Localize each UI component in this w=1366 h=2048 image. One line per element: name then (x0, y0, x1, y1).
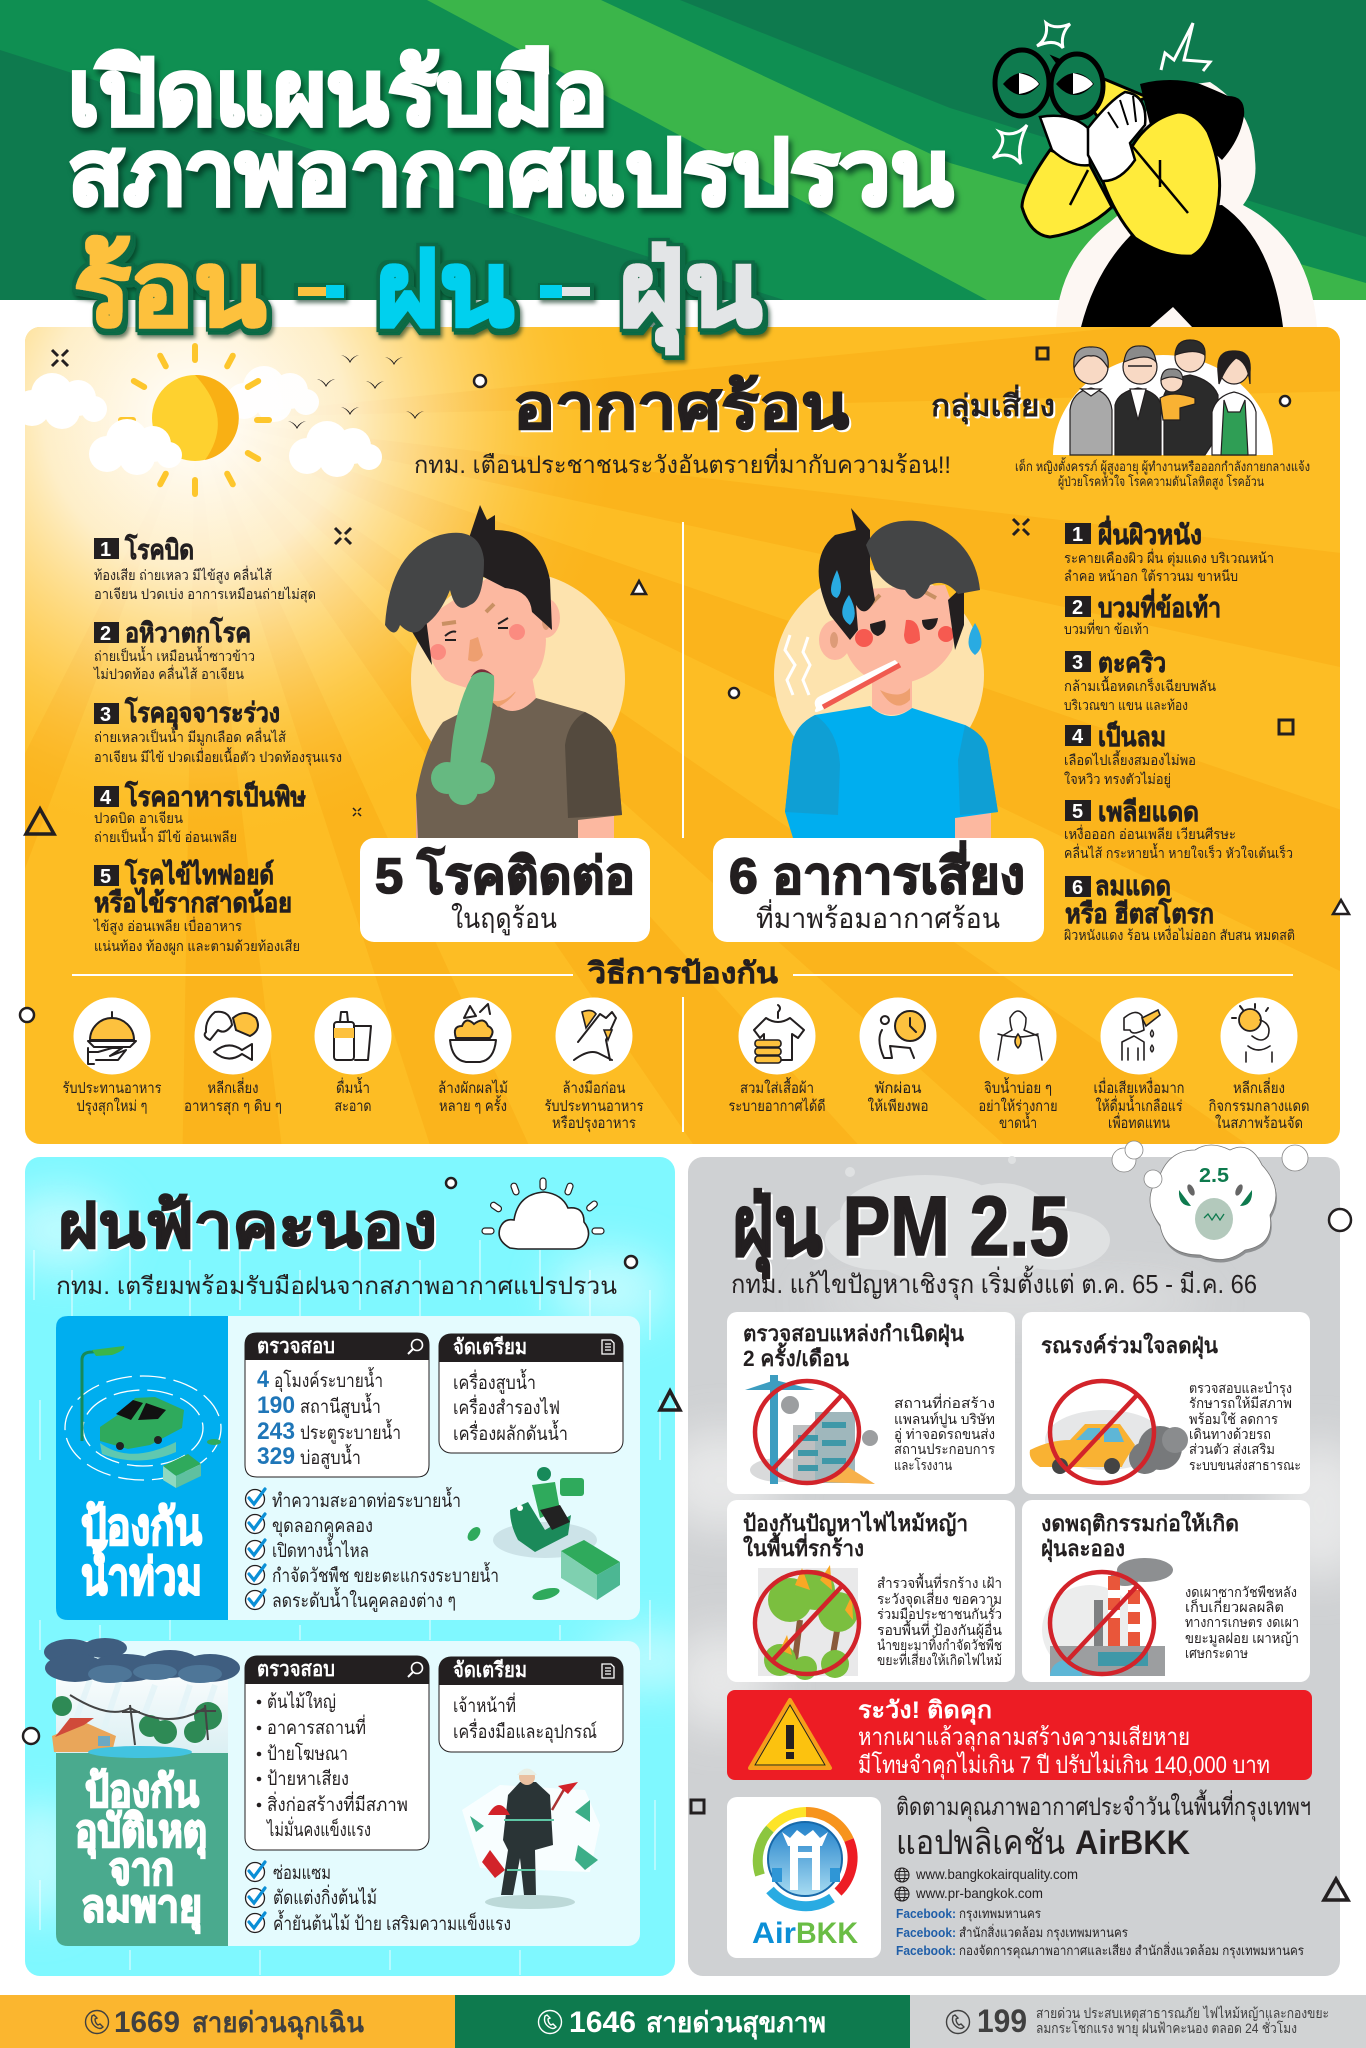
tip: avoid outdoor activity: กิจกรรมกลางแดด (1208, 1098, 1310, 1115)
symptom 5 (1064, 797, 1293, 861)
logo: AirBKK: Air (752, 1917, 796, 1950)
item 4 (94, 779, 306, 845)
label: flood prevention: ป้องกัน (81, 1499, 202, 1555)
symptom 3: ตะคริว (1098, 648, 1166, 678)
card: inspect dust sources: สถานที่ก่อสร้าง (894, 1394, 995, 1411)
symptom 4 (1064, 719, 1196, 788)
warning banner: หากเผาแล้วลุกลามสร้างความเสียหาย (858, 1724, 1190, 1752)
card: inspect dust sources (727, 1312, 1015, 1494)
box: inspect: 243 (257, 1418, 295, 1445)
item 3: โรคอุจจาระร่วง (124, 696, 280, 730)
card: inspect dust sources: และโรงงาน (894, 1457, 952, 1473)
heat heading subtitle: hot rain dust words (74, 232, 762, 354)
tip: sip water: ขาดน้ำ (999, 1112, 1037, 1132)
card: reduce dust campaign: รณรงค์ร่วมใจลดฝุ่น (1041, 1332, 1218, 1360)
text block: AirBKK app info: www.pr-bangkok.com (915, 1885, 1043, 1901)
tip: mineral drink: เมื่อเสียเหงื่อมาก (1094, 1077, 1184, 1097)
box: prepare: เครื่องสูบน้ำ (453, 1369, 536, 1394)
item 1 (94, 533, 316, 603)
risk group: ผู้ป่วยโรคหัวใจ โรคความดันโลหิตสูง โรคอ้วน (1058, 474, 1264, 490)
logo: AirBKK (727, 1797, 881, 1958)
tip: avoid raw food: อาหารสุก ๆ ดิบ ๆ (184, 1098, 282, 1116)
tip: rest: ให้เพียงพอ (868, 1097, 928, 1115)
symptom 4: เลือดไปเลี้ยงสมองไม่พอ (1064, 750, 1196, 768)
item 2: ไม่ปวดท้อง คลื่นไส้ อาเจียน (93, 665, 244, 682)
sun with clouds and birds (14, 343, 424, 497)
item 4: 4 (100, 787, 112, 809)
heading: PM 2.5 (731, 1179, 1257, 1300)
card: stop dust behaviours: เก็บเกี่ยวผลผลิต (1185, 1598, 1284, 1615)
box: inspect: บ่อสูบน้ำ (300, 1444, 361, 1469)
smoke behind heading (825, 1156, 1110, 1285)
box: prepare storm: เครื่องมือและอุปกรณ์ (453, 1718, 597, 1744)
card: reduce dust campaign: รักษารถให้มีสภาพ (1189, 1395, 1292, 1411)
risk group (931, 340, 1310, 490)
symptom 5: เหงื่อออก อ่อนเพลีย เวียนศีรษะ (1064, 825, 1236, 842)
hotline 1646 (538, 2006, 826, 2040)
checklist: flood: เปิดทางน้ำไหล (272, 1537, 369, 1562)
card: stop dust behaviours: เศษกระดาษ (1185, 1645, 1248, 1661)
label: storm prevention (75, 1767, 207, 1934)
box: prepare storm: เจ้าหน้าที่ (453, 1692, 516, 1717)
hotline 199: ลมกระโชกแรง พายุ ฝนฟ้าคะนอง ตลอด 24 ชั่วโมง (1036, 2019, 1297, 2037)
hotline 1669 (86, 2006, 364, 2040)
card: prevent grass fires: รอบพื้นที่ ป้องกันผู้อื่น (877, 1620, 1002, 1639)
item 3: อาเจียน มีไข้ ปวดเมื่อยเนื้อตัว ปวดท้องรุนแรง (94, 747, 342, 766)
icon: no factory (1042, 1558, 1173, 1676)
box: inspect storm: ป้ายโฆษณา (267, 1742, 348, 1765)
label: storm prevention: อุบัติเหตุ (75, 1807, 207, 1859)
item 3: 3 (100, 704, 111, 726)
heading: hot weather (414, 373, 951, 479)
icon: warning triangle (750, 1700, 830, 1768)
heading: hot weather: อากาศร้อน (513, 373, 849, 442)
box: inspect: 329 (257, 1443, 295, 1470)
title: เปิดแผนรับมือ (68, 44, 608, 144)
heading: thunderstorm (56, 1192, 617, 1300)
label: flood prevention (81, 1499, 202, 1605)
card: prevent grass fires: ป้องกันปัญหาไฟไหม้หญ้า (743, 1510, 968, 1537)
checklist: flood: ลดระดับน้ำในคูคลองต่าง ๆ (272, 1587, 456, 1612)
card: storm accidents (44, 1638, 640, 1946)
symptom 6: ผิวหนังแดง ร้อน เหงื่อไม่ออก สับสน หมดสติ (1064, 926, 1295, 943)
text block: AirBKK app info: www.bangkokairquality.com (915, 1866, 1078, 1882)
card: reduce dust campaign: ตรวจสอบและบำรุง (1189, 1380, 1292, 1397)
title: สภาพอากาศแปรปรวน (68, 124, 953, 224)
box: inspect: 4 (257, 1366, 270, 1393)
icon: no fire (755, 1565, 859, 1680)
prevention icons row (62, 998, 1310, 1133)
card: prevent grass fires: สำรวจพื้นที่รกร้าง เฝ้า (877, 1573, 1002, 1591)
item 1: ท้องเสีย ถ่ายเหลว มีไข้สูง คลื่นไส้ (94, 566, 272, 584)
title (68, 44, 953, 224)
tip: avoid raw food (184, 998, 282, 1116)
callout: 5 infectious diseases: ในฤดูร้อน (451, 902, 557, 936)
box: inspect storm (245, 1656, 429, 1850)
tip: wash hands: รับประทานอาหาร (544, 1098, 644, 1115)
tip: avoid outdoor activity: ในสภาพร้อนจัด (1215, 1114, 1303, 1132)
symptom 1 (1064, 515, 1274, 584)
checklist: storm (246, 1862, 511, 1935)
tip: fresh food: ปรุงสุกใหม่ ๆ (76, 1097, 148, 1116)
list: 5 infectious diseases (93, 533, 342, 955)
box: inspect: ประตูระบายน้ำ (300, 1419, 401, 1444)
yellow panel: hot weather (25, 327, 1340, 1144)
card: prevent grass fires: ในพื้นที่รกร้าง (743, 1532, 864, 1561)
box: inspect: 190 (257, 1392, 295, 1419)
heading: thunderstorm: ฝนฟ้าคะนอง (58, 1192, 437, 1261)
card: stop dust behaviours: ฝุ่นละออง (1041, 1536, 1125, 1563)
card: reduce dust campaign: ส่วนตัว ส่งเสริม (1189, 1441, 1275, 1457)
illustration: sick man vomiting (385, 505, 625, 840)
box: inspect: ตรวจสอบ (257, 1335, 335, 1358)
panel: PM 2.5 dust (660, 1141, 1366, 1976)
card: prevent grass fires (727, 1500, 1015, 1682)
illustration: man with heat symptoms (774, 508, 998, 840)
mascot: PM 2.5 dust cloud (1112, 1141, 1308, 1262)
checklist: flood: ทำความสะอาดท่อระบายน้ำ (272, 1487, 461, 1512)
card: reduce dust campaign: พร้อมใช้ ลดการ (1189, 1411, 1278, 1427)
illustration: flooded car (65, 1346, 221, 1488)
heading: prevention: วิธีการป้องกัน (587, 958, 778, 990)
box: inspect storm: ป้ายหาเสียง (267, 1768, 349, 1790)
callout: 6 risk symptoms: ที่มาพร้อมอากาศร้อน (756, 899, 1000, 934)
item 4: ถ่ายเป็นน้ำ มีไข้ อ่อนเพลีย (94, 827, 237, 845)
symptom 2: บวมที่ข้อเท้า (1098, 588, 1221, 623)
box: inspect storm: อาคารสถานที่ (267, 1714, 366, 1739)
text block: AirBKK app info: Facebook: (896, 1906, 956, 1921)
symptom 1: ลำคอ หน้าอก ใต้ราวนม ขาหนีบ (1064, 568, 1238, 584)
card: stop dust behaviours: ทางการเกษตร งดเผา (1185, 1614, 1299, 1630)
symptom 2: บวมที่ขา ข้อเท้า (1064, 620, 1149, 637)
symptom 6 (1064, 871, 1295, 943)
text block: AirBKK app info: สำนักสิ่งแวดล้อม กรุงเทพมหานคร (959, 1924, 1128, 1941)
checklist: storm: ซ่อมแซม (273, 1863, 331, 1884)
box: prepare: จัดเตรียม (453, 1335, 527, 1359)
hotline 199: 199 (977, 2003, 1027, 2039)
hotline 1669: 1669 (114, 2006, 180, 2039)
callout: 6 risk symptoms (713, 838, 1044, 942)
hotline 199 (946, 2003, 1329, 2039)
woman with binoculars illustration (993, 23, 1317, 327)
text block: AirBKK app info: กรุงเทพมหานคร (959, 1906, 1041, 1922)
item 1: 1 (100, 539, 111, 561)
item 5: แน่นท้อง ท้องผูก และตามด้วยท้องเสีย (94, 938, 300, 955)
item 1: อาเจียน ปวดเบ่ง อาการเหมือนถ่ายไม่สุด (94, 586, 316, 603)
hotline 1669: สายด่วนฉุกเฉิน (192, 2007, 364, 2040)
item 3 (94, 696, 342, 766)
hotline 1646: 1646 (569, 2006, 636, 2039)
icon: cloud (482, 1178, 604, 1249)
box: inspect storm: ตรวจสอบ (257, 1658, 335, 1681)
box: prepare storm (439, 1657, 623, 1752)
symptom 2 (1064, 588, 1221, 637)
tip: rest (860, 998, 936, 1115)
symptom 2: 2 (1072, 597, 1083, 619)
heading: PM 2.5: กทม. แก้ไขปัญหาเชิงรุก เริ่มตั้งแต่ ต.ค. 65 - มี.ค. 66 (731, 1265, 1257, 1300)
box: inspect: สถานีสูบน้ำ (300, 1393, 381, 1418)
tip: wash vegetables (434, 998, 512, 1115)
decorative marks (20, 348, 1351, 1900)
tip: rest: พักผ่อน (874, 1080, 922, 1097)
text block: AirBKK app info: กองจัดการคุณภาพอากาศและเสียง สำนักสิ่งแวดล้อม กรุงเทพมหานคร (959, 1942, 1304, 1959)
item 5: 5 (100, 866, 111, 888)
card: stop dust behaviours: งดเผาซากวัชพืชหลัง (1185, 1584, 1297, 1600)
item 2: ถ่ายเป็นน้ำ เหมือนน้ำซาวข้าว (94, 646, 255, 664)
card: prevent grass fires: ร่วมมือประชาชนกันรั้ว (877, 1604, 1002, 1622)
checklist: flood (246, 1487, 499, 1612)
item 4: โรคอาหารเป็นพิษ (124, 779, 306, 812)
item 5 (93, 858, 300, 955)
symptom 3: 3 (1072, 652, 1083, 674)
symptom 6: 6 (1072, 877, 1083, 899)
tip: mineral drink: เพื่อทดแทน (1108, 1112, 1170, 1132)
list: 6 heat symptoms (1064, 515, 1295, 943)
heading: thunderstorm: กทม. เตรียมพร้อมรับมือฝนจากสภาพอากาศแปรปรวน (56, 1273, 617, 1300)
text block: AirBKK app info: Facebook: (896, 1943, 956, 1958)
symptom 6: หรือ ฮีตสโตรก (1065, 897, 1214, 929)
item 1: โรคบิด (124, 533, 194, 565)
tip: mineral drink: ให้ดื่มน้ำเกลือแร่ (1096, 1095, 1182, 1115)
tip: avoid raw food: หลีกเลี่ยง (208, 1077, 258, 1097)
logo: AirBKK: BKK (796, 1917, 858, 1950)
box: inspect (245, 1333, 429, 1477)
box: inspect: อุโมงค์ระบายน้ำ (274, 1367, 383, 1393)
tip: wash vegetables: ล้างผักผลไม้ (438, 1079, 508, 1097)
item 2: อหิวาตกโรค (125, 616, 251, 648)
symptom 3: บริเวณขา แขน และท้อง (1064, 697, 1188, 713)
illustration: scooter in flood (465, 1467, 620, 1602)
card: stop dust behaviours: งดพฤติกรรมก่อให้เกิด (1041, 1510, 1239, 1536)
tip: sip water: จิบน้ำบ่อย ๆ (984, 1077, 1052, 1097)
card: stop dust behaviours (1022, 1500, 1310, 1682)
card: reduce dust campaign (1022, 1312, 1310, 1494)
item 5: ไข้สูง อ่อนเพลีย เบื่ออาหาร (93, 917, 242, 935)
item 4: ปวดบิด อาเจียน (94, 810, 183, 826)
hotline 1646: สายด่วนสุขภาพ (646, 2007, 826, 2040)
callout: 6 risk symptoms: 6 อาการเสี่ยง (729, 841, 1025, 904)
heat heading subtitle: hot rain dust words: ฝุ่น (618, 232, 762, 354)
box: prepare storm: จัดเตรียม (453, 1658, 527, 1682)
card: prevent grass fires: ระวังจุดเสี่ยง ขอความ (877, 1590, 1002, 1608)
card: reduce dust campaign: ระบบขนส่งสาธารณะ (1189, 1457, 1301, 1473)
symptom 3: กล้ามเนื้อหดเกร็งเฉียบพลัน (1064, 676, 1216, 694)
item 3: ถ่ายเหลวเป็นน้ำ มีมูกเลือด คลื่นไส้ (94, 727, 286, 746)
item 5: หรือไข้รากสาดน้อย (94, 887, 292, 918)
tip: clean water (314, 998, 392, 1115)
tip: sip water: อย่าให้ร่างกาย (978, 1097, 1058, 1115)
card: inspect dust sources: สถานประกอบการ (894, 1441, 995, 1457)
text block: AirBKK app info (895, 1789, 1311, 1959)
card: reduce dust campaign: เดินทางด้วยรถ (1189, 1426, 1271, 1442)
tip: avoid outdoor activity: หลีกเลี่ยง (1233, 1077, 1285, 1097)
tip: fresh food (62, 998, 162, 1116)
item 2 (93, 616, 255, 682)
callout: 5 infectious diseases (360, 838, 650, 942)
tip: airy clothes (728, 998, 826, 1115)
label: storm prevention: จาก (109, 1845, 174, 1894)
card: prevent grass fires: นำขยะมาทิ้งกำจัดวัชพืช (877, 1635, 1002, 1653)
tip: airy clothes: สวมใส่เสื้อผ้า (740, 1077, 814, 1097)
warning banner (727, 1690, 1312, 1780)
symptom 5: 5 (1072, 801, 1083, 823)
panel: thunderstorm (0, 1157, 710, 1976)
illustration: firefighter (462, 1768, 600, 1909)
tip: sip water (978, 998, 1058, 1132)
symptom 1: ระคายเคืองผิว ผื่น ตุ่มแดง บริเวณหน้า (1064, 549, 1274, 567)
label: storm prevention: ป้องกัน (85, 1767, 199, 1816)
symptom 6: ลมแดด (1095, 871, 1171, 901)
tip: clean water: สะอาด (334, 1098, 372, 1115)
symptom 5: เพลียแดด (1098, 797, 1199, 827)
icon: no construction (745, 1375, 878, 1484)
heading: PM 2.5: ฝุ่น PM 2.5 (732, 1179, 1069, 1279)
tip: fresh food: รับประทานอาหาร (62, 1080, 162, 1097)
tip: wash hands: หรือปรุงอาหาร (552, 1115, 636, 1133)
tip: avoid outdoor activity (1208, 998, 1310, 1132)
warning banner: มีโทษจำคุกไม่เกิน 7 ปี ปรับไม่เกิน 140,000 บาท (858, 1751, 1270, 1780)
symptom 1: ผื่นผิวหนัง (1098, 515, 1202, 550)
card: inspect dust sources: แพลนท์ปูน บริษัท (894, 1411, 995, 1428)
card: flood prevention (56, 1316, 640, 1620)
card: stop dust behaviours: ขยะมูลฝอย เผาหญ้า (1185, 1630, 1299, 1647)
text block: AirBKK app info: Facebook: (896, 1925, 956, 1940)
tip: mineral drink (1094, 998, 1184, 1132)
box: inspect storm: ไม่มั่นคงแข็งแรง (265, 1816, 371, 1841)
checklist: storm: ค้ำยันต้นไม้ ป้าย เสริมความแข็งแรง (273, 1910, 511, 1935)
header background (0, 0, 1366, 300)
symptom 1: 1 (1072, 524, 1083, 546)
label: flood prevention: น้ำท่วม (81, 1540, 202, 1605)
symptom 4: เป็นลม (1098, 719, 1166, 752)
box: prepare: เครื่องสำรองไฟ (453, 1394, 560, 1419)
item 5: โรคไข้ไทฟอยด์ (124, 858, 274, 890)
callout: 5 infectious diseases: 5 โรคติดต่อ (375, 846, 635, 904)
icon: no smoking car (1030, 1381, 1188, 1483)
tip: airy clothes: ระบายอากาศได้ดี (728, 1097, 826, 1115)
hotline 199: สายด่วน ประสบเหตุสาธารณภัย ไฟไหม้หญ้าและกองขยะ (1036, 2005, 1329, 2022)
card: inspect dust sources: อู่ ท่าจอดรถขนส่ง (894, 1426, 995, 1443)
checklist: flood: กำจัดวัชพืช ขยะตะแกรงระบายน้ำ (272, 1562, 499, 1587)
tip: wash hands: ล้างมือก่อน (562, 1080, 626, 1097)
symptom 4: ใจหวิว ทรงตัวไม่อยู่ (1064, 771, 1171, 788)
box: inspect storm: สิ่งก่อสร้างที่มีสภาพ (267, 1791, 408, 1816)
illustration: storm clouds and house (44, 1638, 240, 1758)
symptom 4: 4 (1072, 726, 1084, 748)
label: storm prevention: ลมพายุ (81, 1882, 202, 1934)
checklist: flood: ขุดลอกคูคลอง (272, 1516, 373, 1538)
warning banner: ระวัง! ติดคุก (858, 1697, 992, 1726)
box: prepare: เครื่องผลักดันน้ำ (453, 1420, 568, 1445)
heat heading subtitle: hot rain dust words: ร้อน (74, 232, 266, 348)
card: inspect dust sources: ตรวจสอบแหล่งกำเนิดฝุ่น (743, 1321, 964, 1348)
tip: wash hands (544, 998, 644, 1133)
risk group: กลุ่มเสี่ยง (931, 384, 1055, 425)
checklist: storm: ตัดแต่งกิ่งต้นไม้ (273, 1884, 377, 1909)
item 2: 2 (100, 623, 111, 645)
symptom 5: คลื่นไส้ กระหายน้ำ หายใจเร็ว หัวใจเต้นเร็ว (1064, 843, 1293, 861)
symptom 3 (1064, 648, 1216, 713)
card: inspect dust sources: 2 ครั้ง/เดือน (743, 1342, 849, 1371)
divider (682, 522, 684, 838)
footer: hotlines (0, 1995, 1366, 2048)
tip: wash vegetables: หลาย ๆ ครั้ง (439, 1095, 507, 1115)
text block: AirBKK app info: AirBKK (1075, 1824, 1190, 1862)
box: prepare (439, 1334, 623, 1453)
risk group: เด็ก หญิงตั้งครรภ์ ผู้สูงอายุ ผู้ทำงานหรือออกกำลังกายกลางแจ้ง (1015, 457, 1310, 475)
box: inspect storm: ต้นไม้ใหญ่ (267, 1691, 336, 1713)
card: prevent grass fires: ขยะที่เสี่ยงให้เกิดไฟไหม้ (877, 1651, 1002, 1668)
mascot: PM 2.5 dust cloud: 2.5 (1199, 1165, 1229, 1187)
tip: clean water: ดื่มน้ำ (336, 1077, 370, 1097)
heat heading subtitle: hot rain dust words: ฝน (375, 232, 514, 348)
text block: AirBKK app info: แอปพลิเคชัน (896, 1824, 1065, 1862)
heading: hot weather: กทม. เตือนประชาชนระวังอันตรายที่มากับความร้อน!! (414, 448, 951, 479)
